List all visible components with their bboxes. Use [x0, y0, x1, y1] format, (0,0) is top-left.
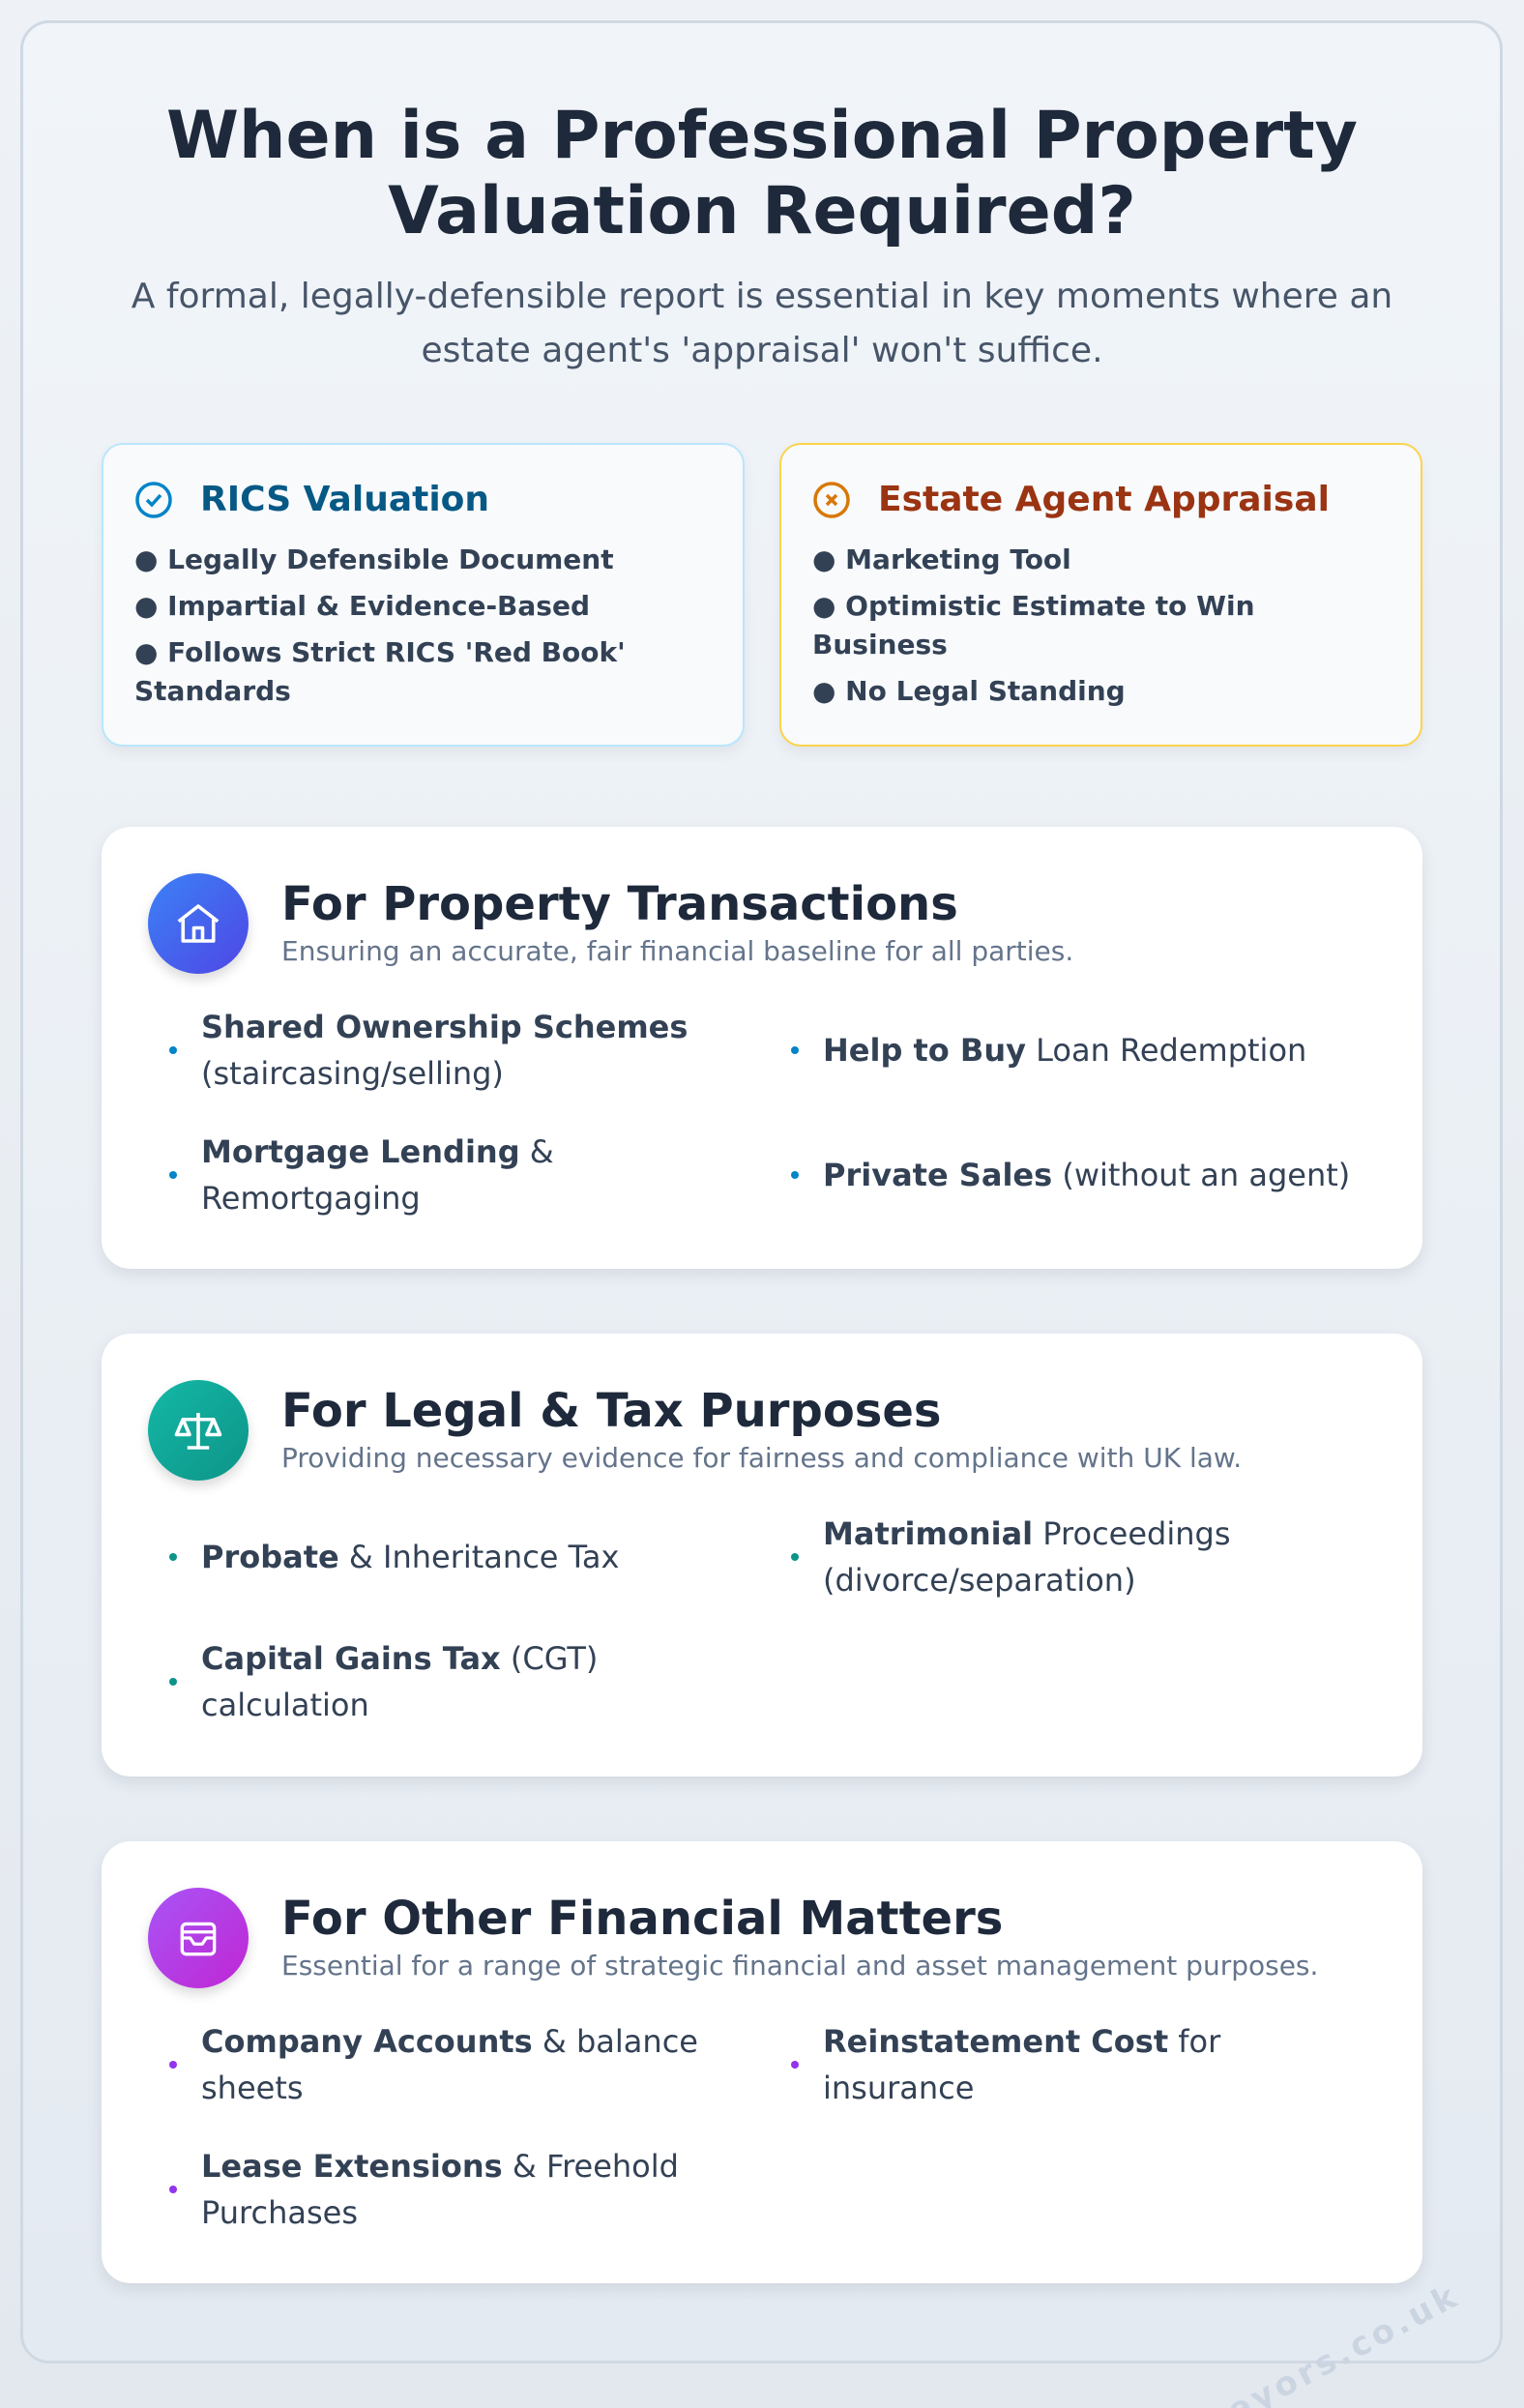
list: RICS points: ● Legally Defensible Document	[134, 543, 614, 575]
list: transaction items: Shared Ownership Schemes (staircasing/selling)	[201, 1009, 688, 1092]
subtitle	[132, 277, 1392, 370]
list: transaction items: Help to Buy Loan Redemption	[823, 1032, 1306, 1069]
header: legal and tax: For Legal & Tax Purposes	[281, 1384, 942, 1438]
list: transaction items: Mortgage Lending &	[201, 1133, 554, 1170]
list: appraisal points: ● Optimistic Estimate to Win Business	[812, 590, 1255, 661]
panel: legal and tax	[102, 1334, 1422, 1777]
list: financial items: Company Accounts & balance	[201, 2023, 698, 2060]
title: When is a Professional Property	[166, 98, 1358, 174]
header: property transactions: For Property Transactions	[281, 877, 958, 931]
list: RICS points	[134, 543, 626, 707]
list: appraisal points: ● No Legal Standing	[812, 675, 1126, 707]
panel: other financial matters	[102, 1841, 1422, 2283]
panel: property transactions	[102, 827, 1422, 1269]
list: financial items: Reinstatement Cost for	[823, 2023, 1220, 2060]
header: other financial: For Other Financial Matters	[281, 1892, 1003, 1946]
list: financial items: insurance	[823, 2070, 974, 2106]
icon: wallet	[148, 1888, 249, 1988]
header: property transactions	[144, 873, 1073, 984]
header: property transactions: Ensuring an accurate, fair financial baseline for all parties.	[281, 935, 1073, 967]
list: legal items: (divorce/separation)	[823, 1562, 1136, 1599]
list: financial items: Purchases	[201, 2194, 358, 2231]
list: transaction items: Private Sales (without an agent)	[823, 1157, 1350, 1193]
list: RICS points: ● Follows Strict RICS 'Red Book' Standards	[134, 636, 626, 707]
list: legal items: Capital Gains Tax (CGT)	[201, 1640, 598, 1677]
list: appraisal points: ● Marketing Tool	[812, 543, 1071, 575]
list: legal items: Probate & Inheritance Tax	[201, 1539, 619, 1575]
panel: RICS valuation	[102, 443, 745, 747]
title: Valuation Required?	[388, 173, 1136, 250]
panel: estate agent appraisal	[779, 443, 1422, 747]
subtitle: A formal, legally-defensible report is essential in key moments where an	[132, 277, 1392, 316]
header: other financial: Essential for a range of strategic financial and asset management purposes.	[281, 1950, 1318, 1982]
subtitle: estate agent's 'appraisal' won't suffice.	[421, 331, 1103, 370]
header: legal and tax	[144, 1380, 1242, 1490]
list: legal items	[169, 1515, 1230, 1723]
list: legal items: Matrimonial Proceedings	[823, 1515, 1230, 1552]
list: RICS points: ● Impartial & Evidence-Based	[134, 590, 590, 622]
list: legal items: calculation	[201, 1687, 369, 1723]
icon: scales	[148, 1380, 249, 1481]
list: financial items: Lease Extensions & Freehold	[201, 2148, 679, 2185]
list: transaction items: Remortgaging	[201, 1180, 421, 1217]
list: transaction items	[169, 1009, 1350, 1217]
list: financial items: sheets	[201, 2070, 304, 2106]
title	[166, 98, 1358, 250]
header: legal and tax: Providing necessary evidence for fairness and compliance with UK law.	[281, 1442, 1242, 1474]
header: other financial	[144, 1888, 1318, 1998]
heading: RICS Valuation: RICS Valuation	[200, 480, 489, 519]
icon: house	[148, 873, 249, 974]
heading: Estate Agent Appraisal: Estate Agent Appraisal	[878, 480, 1330, 519]
list: financial items	[169, 2023, 1220, 2231]
list: appraisal points	[812, 543, 1255, 707]
